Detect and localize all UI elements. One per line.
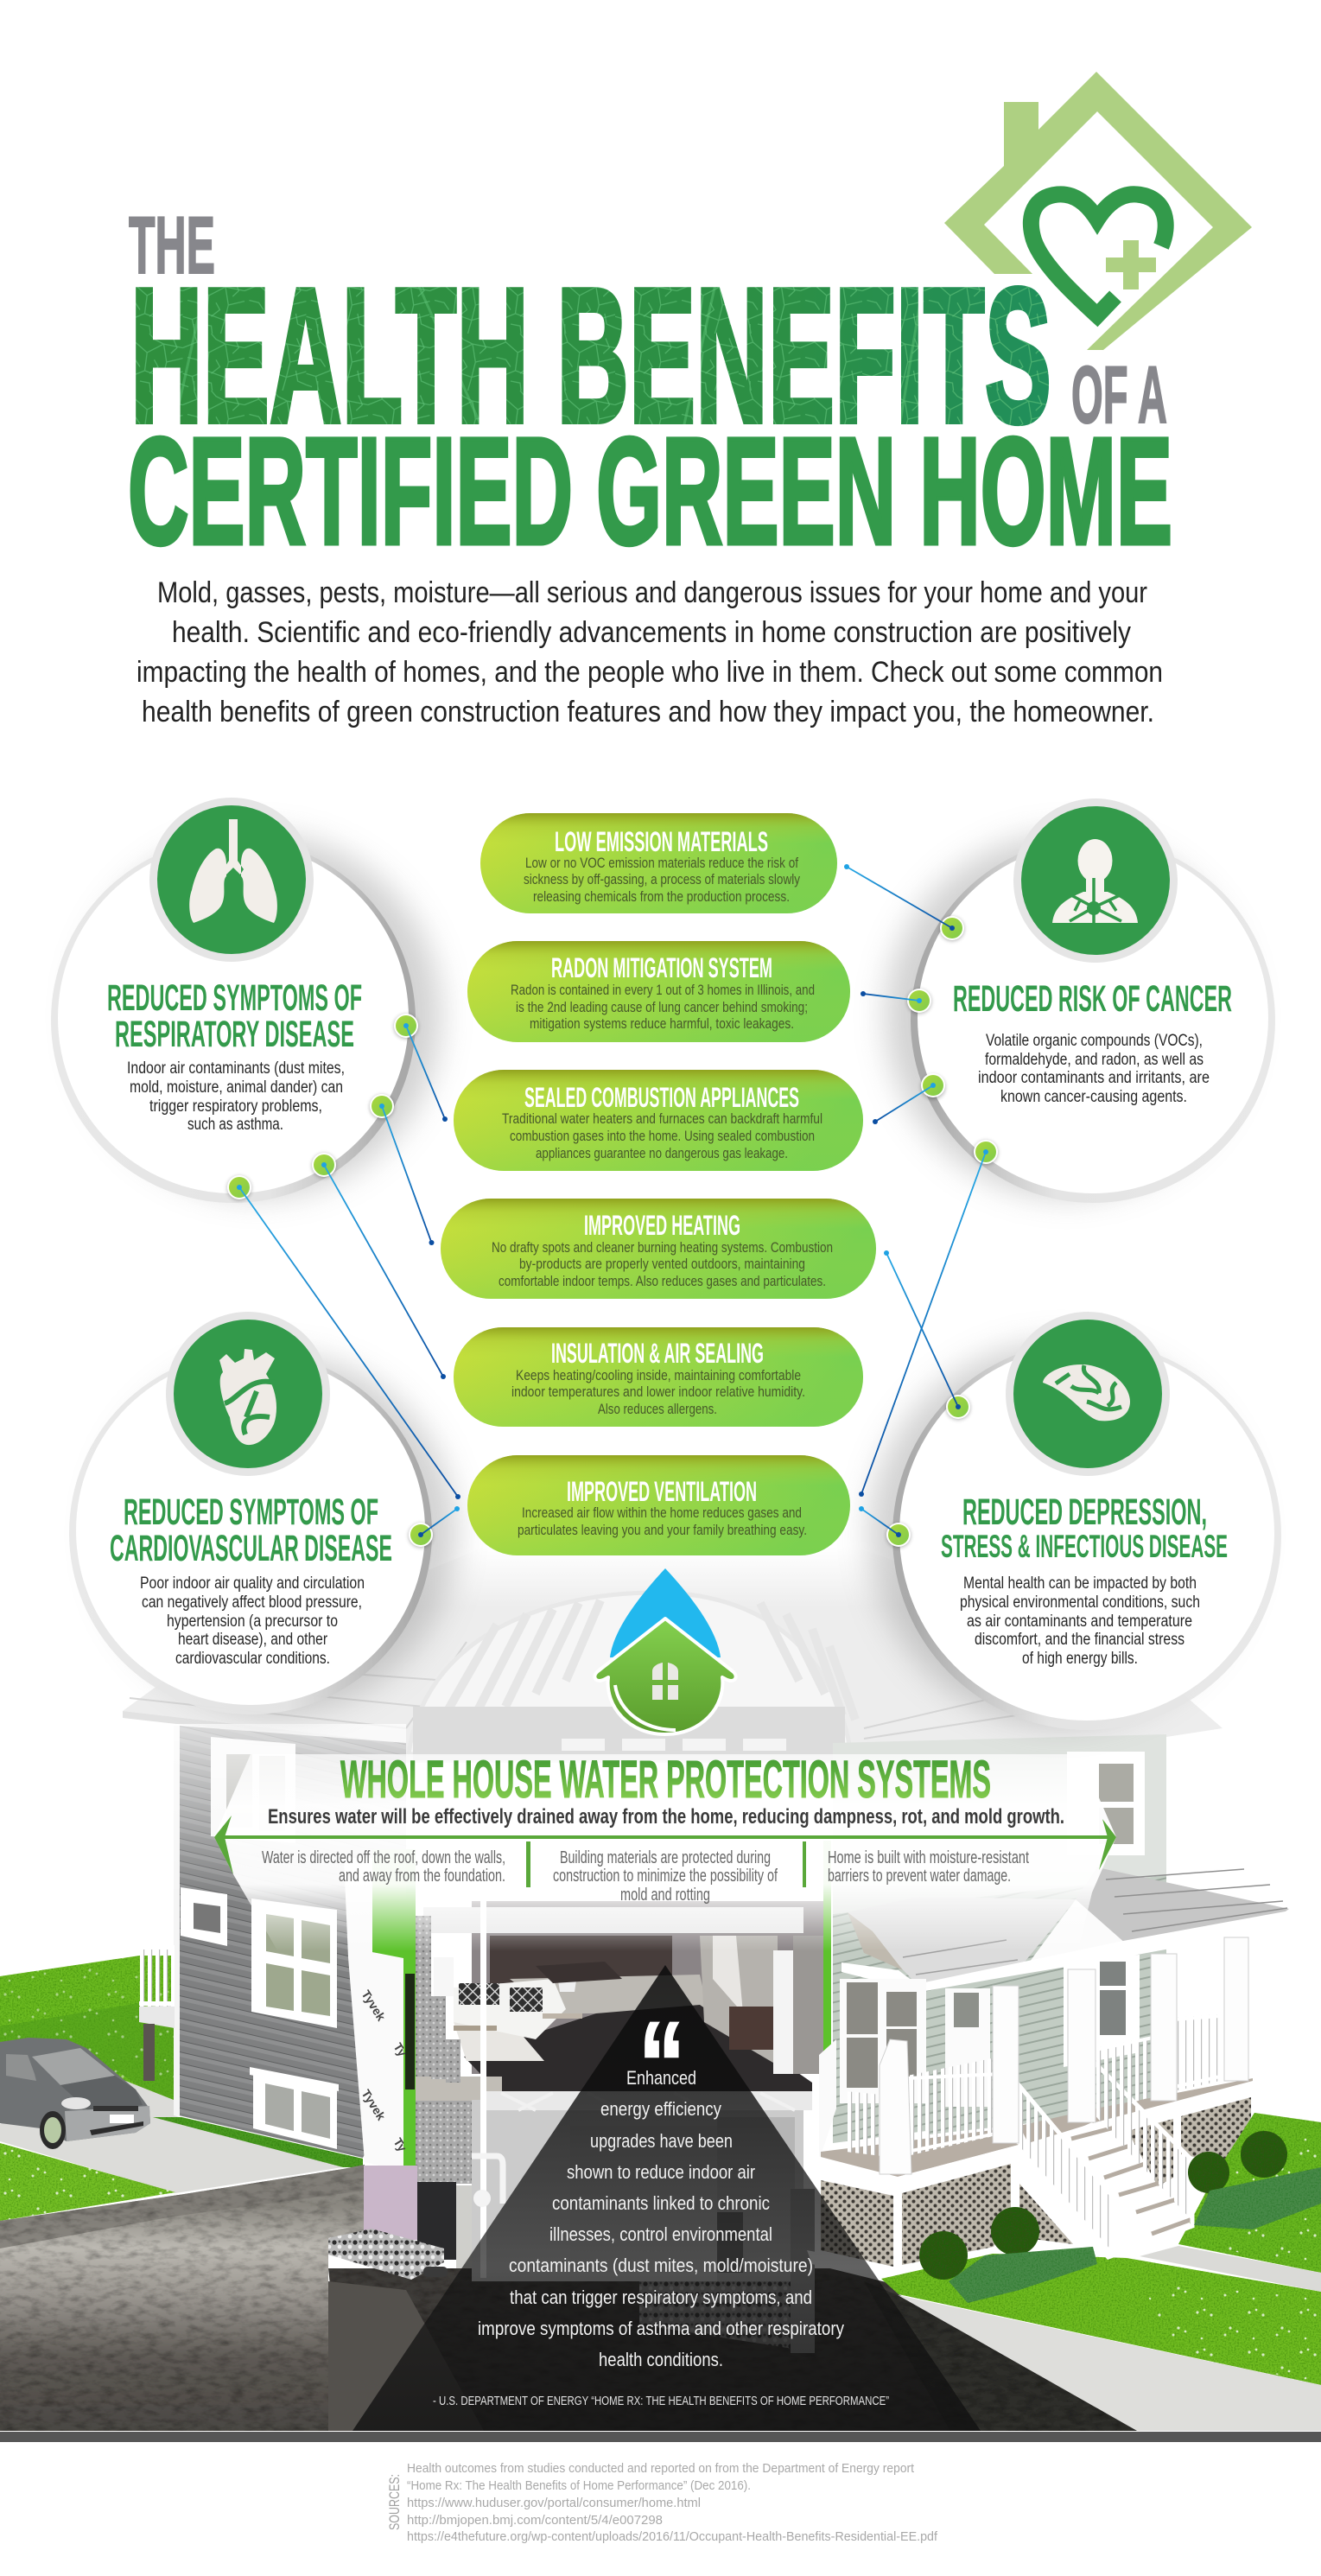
- columns: [880, 1937, 1248, 2174]
- column: moisture barriers: [828, 1848, 1029, 1886]
- icon: water drop and green house: [594, 1568, 736, 1734]
- body text: [502, 1111, 822, 1161]
- quote text: illnesses, control environmental: [549, 2223, 772, 2245]
- deck floor and fascia: [821, 2130, 1019, 2177]
- flower beds: [949, 2167, 1321, 2303]
- column: building materials: [553, 1848, 778, 1905]
- right green wall strip: [823, 1841, 831, 2065]
- railings: [846, 2013, 1231, 2156]
- heading: [107, 977, 362, 1055]
- upper window: [211, 1737, 295, 1843]
- quote text: shown to reduce indoor air: [567, 2161, 755, 2183]
- panel: reduced symptoms of cardiovascular disease: [69, 1312, 456, 1714]
- column: moisture barriers: Home is built with moisture-resistant: [828, 1848, 1029, 1867]
- column: roof drainage: and away from the foundation.: [339, 1867, 505, 1886]
- intro paragraph: [137, 576, 1163, 728]
- sources list: Health outcomes from studies conducted and reported on from the Department of Energy report: [407, 2462, 914, 2476]
- green double arrow line: [214, 1816, 1116, 1874]
- body text: appliances guarantee no dangerous gas leakage.: [536, 1146, 788, 1161]
- quote text: contaminants linked to chronic: [552, 2192, 770, 2214]
- panel: reduced symptoms of respiratory disease: [51, 798, 441, 1203]
- body text: trigger respiratory problems,: [149, 1097, 322, 1116]
- soil cross section: [0, 2165, 1137, 2431]
- body text: [492, 1240, 833, 1289]
- panel: radon mitigation system: [467, 941, 850, 1042]
- body text: Poor indoor air quality and circulation: [140, 1574, 365, 1593]
- connector lines: [239, 867, 986, 1535]
- body text: Also reduces allergens.: [598, 1402, 717, 1417]
- quote text: improve symptoms of asthma and other respiratory: [478, 2318, 844, 2339]
- panel: improved ventilation: [467, 1455, 850, 1555]
- lattice: [821, 2097, 1251, 2267]
- car: [0, 2038, 150, 2149]
- body text: physical environmental conditions, such: [960, 1593, 1200, 1612]
- icon: house logo with heart and plus: [944, 72, 1252, 350]
- column: building materials: Building materials are protected during: [560, 1848, 771, 1867]
- panel: reduced risk of cancer: [886, 798, 1275, 1203]
- left porch window: [840, 1979, 926, 2103]
- body text: as air contaminants and temperature: [967, 1612, 1192, 1631]
- icon: heart: [219, 1349, 276, 1445]
- wall section: insulation, tyvek, foundation: Ty: [391, 2040, 410, 2059]
- heading: SEALED COMBUSTION APPLIANCES: [524, 1082, 799, 1113]
- body text: by-products are properly vented outdoors, maintaining: [519, 1256, 805, 1272]
- body text: Volatile organic compounds (VOCs),: [986, 1032, 1203, 1050]
- wall section: insulation, tyvek, foundation: Ty: [391, 2135, 410, 2154]
- walkways: [1140, 2246, 1321, 2292]
- body text: [978, 1032, 1210, 1106]
- sources: [386, 2462, 938, 2544]
- quote text: Enhanced: [626, 2067, 696, 2089]
- sources list: [407, 2462, 938, 2544]
- body text: [518, 1505, 807, 1538]
- subheading: Ensures water will be effectively drained away from the home, reducing dampness, rot, and mold growth.: [268, 1805, 1064, 1829]
- body text: Keeps heating/cooling inside, maintaining comfortable: [516, 1368, 801, 1383]
- lower window: [250, 2067, 339, 2149]
- left wall: [179, 1726, 406, 2158]
- sources list: http://bmjopen.bmj.com/content/5/4/e007298: [407, 2514, 663, 2528]
- body text: such as asthma.: [187, 1116, 283, 1134]
- icon: person with chest cancer: [1052, 839, 1138, 925]
- body text: Low or no VOC emission materials reduce the risk of: [525, 855, 798, 871]
- stairs: [1009, 2057, 1194, 2260]
- back lawn: [0, 1956, 174, 2121]
- heading: CARDIOVASCULAR DISEASE: [110, 1528, 392, 1569]
- body text: [960, 1574, 1200, 1668]
- bottom bar: [0, 2432, 1321, 2442]
- body text: [511, 983, 815, 1032]
- panel: reduced depression, stress and infectious disease: [869, 1312, 1281, 1730]
- body text: [511, 1368, 805, 1417]
- connectors: [227, 864, 998, 1548]
- deck: [139, 1945, 175, 2081]
- body text: particulates leaving you and your family breathing easy.: [518, 1523, 807, 1538]
- body text: [524, 855, 801, 905]
- heading: [941, 1492, 1228, 1564]
- quote attribution: - U.S. DEPARTMENT OF ENERGY “HOME RX: THE HEALTH BENEFITS OF HOME PERFORMANCE”: [433, 2395, 889, 2408]
- sources label: SOURCES:: [386, 2474, 403, 2530]
- heading: IMPROVED HEATING: [584, 1210, 740, 1241]
- body text: of high energy bills.: [1022, 1650, 1138, 1668]
- body text: combustion gases into the home. Using sealed combustion: [510, 1129, 815, 1144]
- sources list: https://e4thefuture.org/wp-content/uploads/2016/11/Occupant-Health-Benefits-Residential-EE.pdf: [407, 2530, 938, 2544]
- sources list: “Home Rx: The Health Benefits of Home Performance” (Dec 2016).: [407, 2479, 751, 2493]
- heading: IMPROVED VENTILATION: [567, 1476, 757, 1507]
- water protection section: [214, 1750, 1116, 1905]
- body text: can negatively affect blood pressure,: [142, 1593, 362, 1612]
- quote triangle: [352, 1965, 981, 2431]
- roofs: [1076, 1867, 1289, 1946]
- icon: lungs: [189, 819, 277, 923]
- fade overlay behind water protection heading: [174, 1724, 406, 1901]
- driveway: [0, 2074, 343, 2193]
- heading: RADON MITIGATION SYSTEM: [551, 952, 772, 983]
- body text: Increased air flow within the home reduces gases and: [522, 1505, 802, 1521]
- connector end points: [418, 925, 961, 1537]
- body text: mitigation systems reduce harmful, toxic leakages.: [530, 1016, 794, 1032]
- body text: cardiovascular conditions.: [175, 1650, 330, 1668]
- body text: No drafty spots and cleaner burning heating systems. Combustion: [492, 1240, 833, 1256]
- heading: [110, 1492, 392, 1569]
- column: roof drainage: [262, 1848, 505, 1886]
- quote text: contaminants (dust mites, mold/moisture): [509, 2255, 813, 2276]
- bushes: [919, 2131, 1287, 2280]
- body text: discomfort, and the financial stress: [975, 1631, 1184, 1649]
- icon: quote mark: “: [638, 1996, 685, 2132]
- quote text: upgrades have been: [590, 2130, 733, 2152]
- body text: releasing chemicals from the production process.: [533, 889, 790, 905]
- grass strip along wall: [153, 2117, 363, 2167]
- body text: heart disease), and other: [178, 1631, 328, 1649]
- panel: improved heating: [441, 1199, 876, 1299]
- panel: sealed combustion appliances: [454, 1070, 863, 1171]
- body text: formaldehyde, and radon, as well as: [985, 1051, 1204, 1069]
- connector start points: [237, 864, 988, 1511]
- icon: brain: [1043, 1364, 1130, 1421]
- divider: [526, 1841, 530, 1887]
- body text: indoor temperatures and lower indoor relative humidity.: [511, 1384, 805, 1400]
- body text: comfortable indoor temps. Also reduces gases and particulates.: [499, 1274, 826, 1289]
- panel: low emission materials: [480, 813, 837, 913]
- body text: Mental health can be impacted by both: [963, 1574, 1197, 1593]
- panel: insulation and air sealing: [454, 1327, 863, 1427]
- body text: hypertension (a precursor to: [167, 1612, 338, 1631]
- title word: of a: OF A: [1071, 349, 1167, 440]
- heading: INSULATION & AIR SEALING: [551, 1338, 764, 1369]
- body text: mold, moisture, animal dander) can: [130, 1078, 343, 1097]
- title: [128, 200, 1172, 576]
- divider: [803, 1841, 806, 1887]
- body text: sickness by off-gassing, a process of materials slowly: [524, 872, 801, 887]
- quote text: that can trigger respiratory symptoms, and: [510, 2287, 812, 2308]
- title word: the: THE: [129, 200, 215, 290]
- intro paragraph: health benefits of green construction features and how they impact you, the homeowner.: [142, 696, 1154, 728]
- house illustration: [0, 1547, 1321, 2431]
- wall section: insulation, tyvek, foundation: [328, 1849, 503, 2280]
- white banner panel: [214, 1754, 1116, 1979]
- interior: [416, 1901, 829, 2353]
- heading: REDUCED SYMPTOMS OF: [107, 977, 362, 1019]
- sources list: https://www.huduser.gov/portal/consumer/home.html: [407, 2496, 701, 2510]
- middle window: [251, 1899, 337, 2028]
- column: building materials: mold and rotting: [620, 1886, 710, 1905]
- lawn right: [881, 2113, 1321, 2385]
- column: roof drainage: Water is directed off the roof, down the walls,: [262, 1848, 505, 1867]
- body text: [127, 1059, 345, 1134]
- heading: LOW EMISSION MATERIALS: [555, 826, 768, 857]
- body text: Traditional water heaters and furnaces can backdraft harmful: [502, 1111, 822, 1127]
- faded roof: [123, 1547, 1223, 1763]
- column: building materials: construction to minimize the possibility of: [553, 1867, 778, 1886]
- heading: RESPIRATORY DISEASE: [115, 1014, 354, 1055]
- body text: is the 2nd leading cause of lung cancer behind smoking;: [516, 1000, 808, 1015]
- intro paragraph: health. Scientific and eco-friendly advancements in home construction are positively: [172, 616, 1131, 649]
- body text: Radon is contained in every 1 out of 3 homes in Illinois, and: [511, 983, 815, 998]
- right upper wall: [833, 1734, 1166, 1914]
- quote text: [478, 2067, 844, 2370]
- intro paragraph: Mold, gasses, pests, moisture—all serious and dangerous issues for your home and your: [157, 576, 1147, 609]
- intro paragraph: impacting the health of homes, and the people who live in them. Check out some common: [137, 656, 1163, 689]
- front lawn left: [0, 2143, 175, 2221]
- wall section: insulation, tyvek, foundation: Tyvek: [359, 1988, 389, 2024]
- door: [945, 1988, 990, 2107]
- porch house: [807, 1841, 1321, 2431]
- body text: Indoor air contaminants (dust mites,: [127, 1059, 345, 1078]
- porch wall: [930, 1951, 1162, 2134]
- quote text: health conditions.: [599, 2349, 723, 2370]
- body text: known cancer-causing agents.: [1000, 1088, 1187, 1106]
- wall section: insulation, tyvek, foundation: Tyvek: [359, 2087, 389, 2123]
- heading: REDUCED SYMPTOMS OF: [124, 1492, 378, 1533]
- body text: [140, 1574, 365, 1668]
- column: moisture barriers: barriers to prevent water damage.: [828, 1867, 1011, 1886]
- body text: indoor contaminants and irritants, are: [978, 1069, 1210, 1087]
- quote text: energy efficiency: [600, 2098, 721, 2120]
- small window: [181, 1887, 227, 1946]
- connector dots: [227, 916, 998, 1548]
